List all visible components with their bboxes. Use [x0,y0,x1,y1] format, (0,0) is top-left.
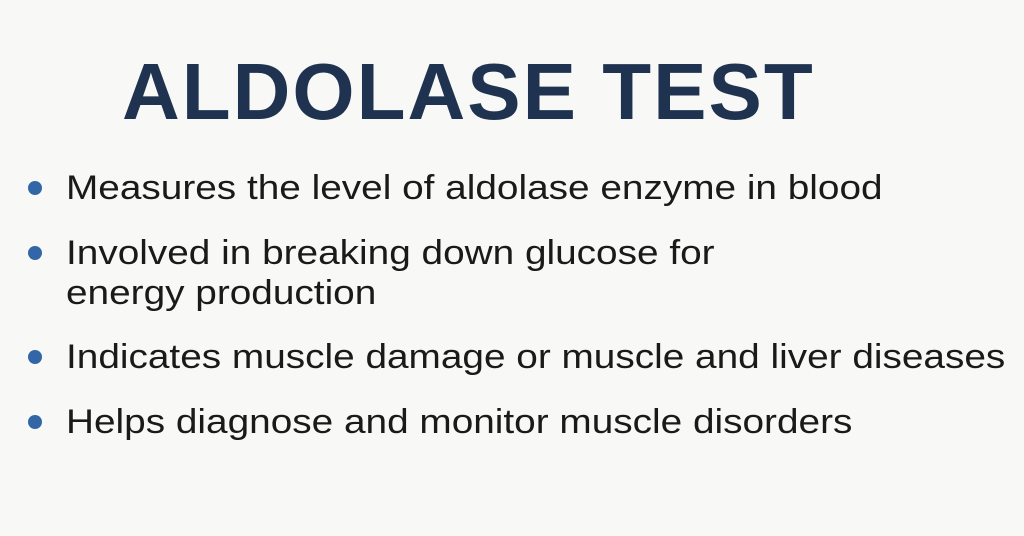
bullet 2: Involved in breaking down glucose for [66,234,715,272]
bullet 1: Measures the level of aldolase enzyme in blood [66,169,883,207]
bullet 2: energy production [66,274,376,312]
bullet 3: Indicates muscle damage or muscle and liver diseases [66,338,1005,376]
title: ALDOLASE TEST [122,47,815,136]
bullet 4: Helps diagnose and monitor muscle disorders [66,403,852,441]
bullet 2 [28,234,715,312]
